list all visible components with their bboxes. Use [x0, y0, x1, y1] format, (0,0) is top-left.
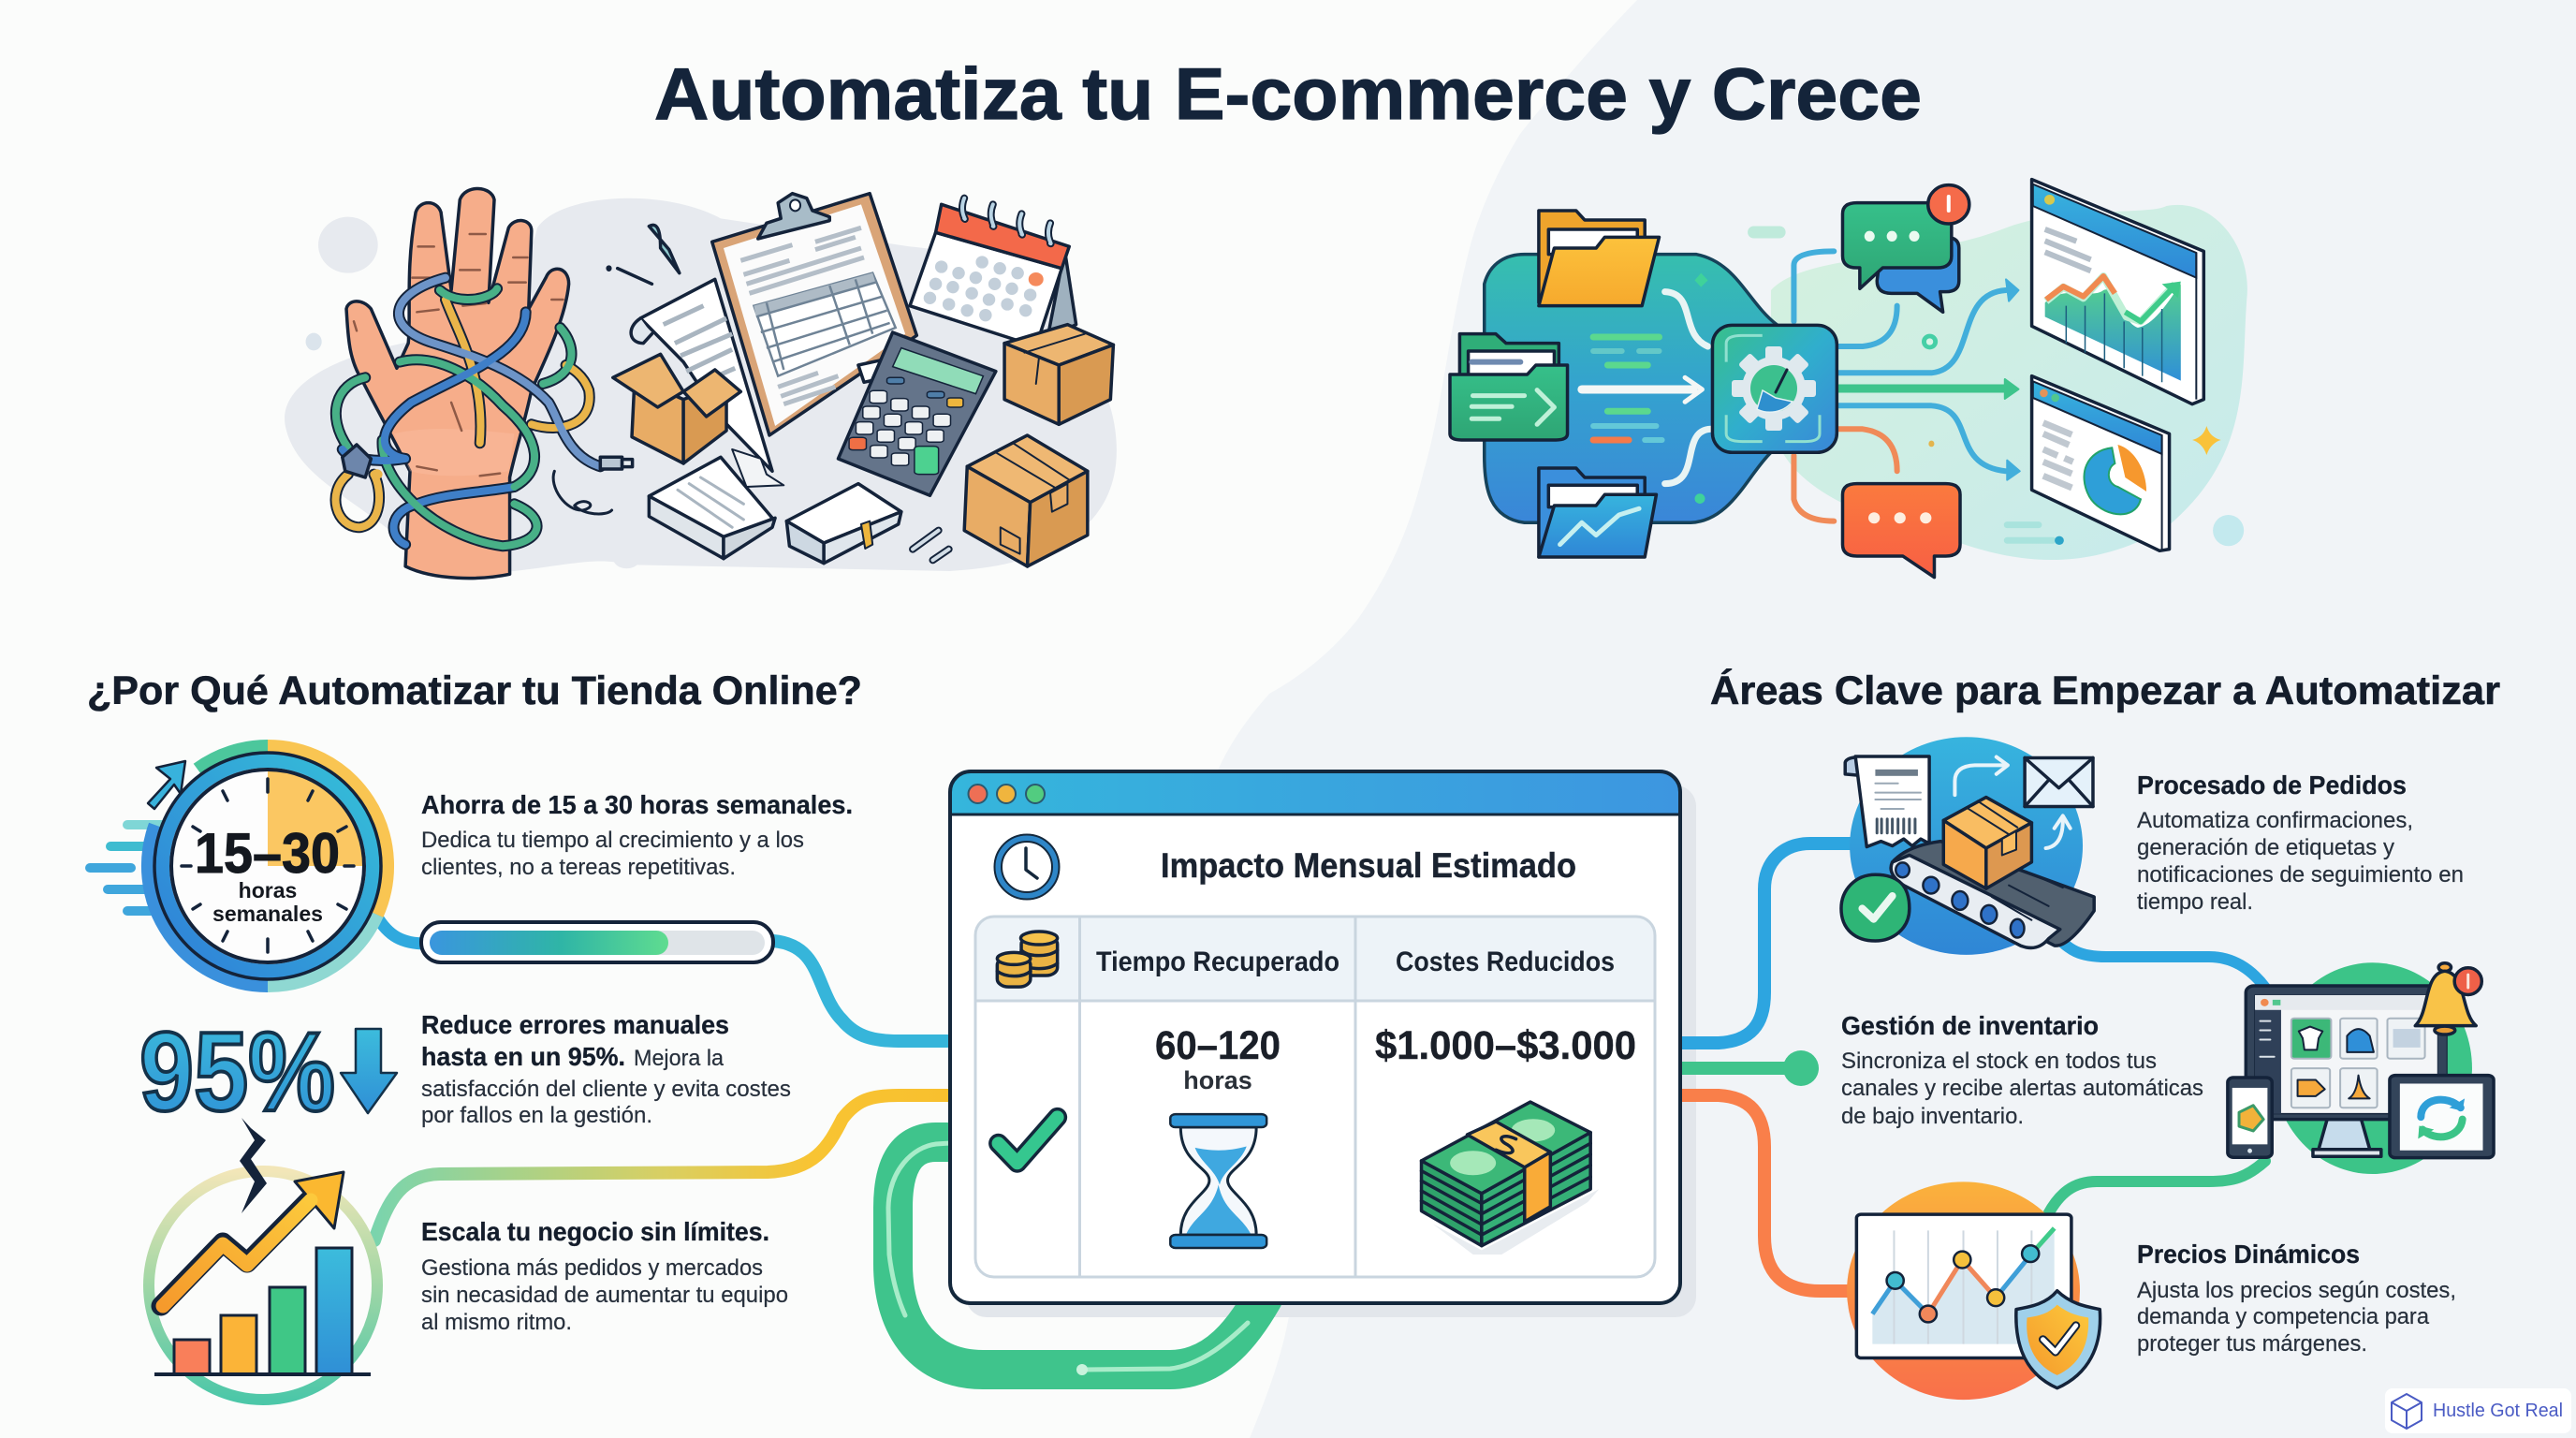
- text: order processing: tiempo real.: [2137, 889, 2253, 915]
- icon: calendar: [910, 198, 1076, 346]
- monitor: [2246, 986, 2447, 1156]
- icon: lightning crack: [240, 1118, 267, 1213]
- text: hours saved: Ahorra de 15 a 30 horas semanales.: [421, 790, 853, 819]
- window header: [950, 771, 1680, 814]
- illustration: manual chaos: [285, 188, 1117, 579]
- icon: yellow folder: [1539, 211, 1660, 306]
- text: errors: satisfacción del cliente y evita costes: [421, 1077, 791, 1102]
- icon: coins: [997, 932, 1058, 987]
- text: inventory: Gestión de inventario: [1841, 1011, 2099, 1040]
- text: order processing: notificaciones de seguimiento en: [2137, 862, 2464, 888]
- icon: loose paper: [631, 279, 772, 471]
- light green blob: [1771, 205, 2247, 560]
- window dots: [968, 785, 1045, 803]
- text: dynamic pricing: [2137, 1240, 2456, 1357]
- text: scale: sin necasidad de aumentar tu equipo: [421, 1283, 788, 1308]
- icon: clock: [994, 835, 1060, 899]
- text: errors: [421, 1010, 791, 1128]
- tablet: [2390, 1076, 2494, 1158]
- text: dynamic pricing: proteger tus márgenes.: [2137, 1331, 2367, 1357]
- icon: dashboard window top: [2032, 180, 2203, 404]
- heading: why automate: ¿Por Qué Automatizar tu Tienda Online?: [87, 668, 862, 713]
- text: scale: al mismo ritmo.: [421, 1310, 572, 1335]
- heading: key areas: Áreas Clave para Empezar a Automatizar: [1710, 668, 2500, 713]
- small accents: [1694, 273, 2221, 545]
- badge: Hustle Got Real: [2385, 1388, 2571, 1433]
- text: inventory: Sincroniza el stock en todos tus: [1841, 1049, 2157, 1074]
- green loop connector: [888, 1142, 1264, 1375]
- table header: time: Tiempo Recuperado: [1096, 946, 1339, 977]
- text: inventory: canales y recibe alertas automáticas: [1841, 1076, 2203, 1101]
- icon: check mark: [999, 1117, 1058, 1163]
- parcel: [1943, 798, 2031, 888]
- icon: order processing: [1841, 737, 2094, 955]
- text: scale: Gestiona más pedidos y mercados: [421, 1255, 763, 1281]
- text: order processing: generación de etiquetas y: [2137, 835, 2394, 860]
- value: hours: 60–120: [1155, 1023, 1281, 1068]
- text: dynamic pricing: Ajusta los precios según costes,: [2137, 1278, 2456, 1303]
- icon: tangled cables: [336, 278, 633, 546]
- background curve panel: [1215, 0, 2576, 1438]
- shield: [2016, 1291, 2100, 1388]
- text: errors: por fallos en la gestión.: [421, 1103, 652, 1128]
- stat: clock 15-30 hours: [90, 745, 388, 987]
- text: inventory: de bajo inventario.: [1841, 1104, 2024, 1129]
- connector lines in blob: [1582, 292, 1711, 484]
- icon: blue folder: [1539, 468, 1656, 557]
- icon: small box: [1004, 325, 1113, 424]
- receipt: [1845, 756, 1929, 847]
- value: hours: horas: [1183, 1066, 1252, 1094]
- text: order processing: Procesado de Pedidos: [2137, 770, 2407, 800]
- value: hours: [1155, 1023, 1281, 1094]
- icon: chat bubbles: [1842, 185, 1969, 312]
- connectors: left and right flow lines: [374, 844, 2265, 1375]
- icon: clipboard with invoice: [712, 194, 916, 435]
- bell: [2415, 963, 2481, 1034]
- icon: gear: [1732, 346, 1816, 431]
- phone: [2228, 1078, 2272, 1157]
- text: hours saved: clientes, no a tereas repetitivas.: [421, 855, 736, 880]
- icon: money stack: [1422, 1102, 1599, 1255]
- icon: hand: [346, 188, 569, 579]
- icon: gear tile: [1712, 325, 1837, 452]
- text: errors: Reduce errores manuales: [421, 1010, 729, 1039]
- bars: [174, 1248, 352, 1374]
- stat: 95 percent: 95%: [139, 1009, 335, 1135]
- main data blob: [1485, 255, 1777, 522]
- icon: cube: [2392, 1394, 2422, 1429]
- icon: stopwatch: semanales: [212, 902, 323, 926]
- table: [975, 917, 1655, 1277]
- check badge: [1841, 874, 1910, 941]
- badge: Hustle Got Real: Hustle Got Real: [2433, 1401, 2563, 1421]
- conveyor: [1891, 842, 2094, 947]
- window shadow: [966, 785, 1696, 1317]
- icon: stopwatch: horas: [239, 878, 297, 902]
- icon: dynamic pricing chart: [1847, 1181, 2100, 1400]
- title: Automatiza tu E-commerce y Crece: [654, 52, 1922, 135]
- icon: inventory devices: [2228, 962, 2494, 1174]
- panel title: Impacto Mensual Estimado: [1161, 846, 1576, 885]
- icon: banknote bundle: [786, 484, 901, 564]
- value: savings: $1.000–$3.000: [1375, 1023, 1636, 1068]
- text: errors: Mejora la: [634, 1046, 724, 1071]
- icon: hourglass: [1170, 1114, 1266, 1248]
- text: hours saved: Dedica tu tiempo al crecimiento y a los: [421, 828, 804, 853]
- arrows: [1954, 757, 2071, 848]
- growth arrow: [161, 1172, 344, 1306]
- progress bar: [421, 922, 773, 962]
- icon: dashboard window bottom: [2032, 376, 2170, 550]
- table header: costs: Costes Reducidos: [1396, 946, 1615, 977]
- icon: down arrow: [341, 1029, 397, 1113]
- icon: up arrow: [148, 761, 185, 809]
- text: order processing: [2137, 770, 2464, 915]
- icon: speed lines: [90, 825, 174, 911]
- text: dynamic pricing: Precios Dinámicos: [2137, 1240, 2360, 1269]
- icon: growth chart: [149, 1171, 377, 1400]
- icon: tools: [606, 225, 680, 284]
- text: dynamic pricing: demanda y competencia para: [2137, 1304, 2430, 1329]
- panel: impacto mensual window: [950, 771, 1680, 1303]
- icon: stopwatch: [147, 745, 388, 987]
- icon: calculator: [838, 332, 996, 495]
- text: scale: Escala tu negocio sin límites.: [421, 1217, 769, 1246]
- text: errors: hasta en un 95%.: [421, 1042, 625, 1071]
- icon: large box: [964, 435, 1088, 566]
- icon: stopwatch: 15–30: [195, 822, 340, 885]
- icon: orange chat bubble: [1842, 484, 1960, 578]
- icon: green folder: [1450, 334, 1568, 440]
- icon: paper clips: [913, 531, 949, 560]
- icon: open cardboard box: [613, 354, 740, 463]
- text: inventory: [1841, 1011, 2203, 1129]
- text: order processing: Automatiza confirmaciones,: [2137, 808, 2413, 833]
- grey blobs: [285, 198, 1117, 575]
- envelope: [2025, 758, 2093, 806]
- illustration: automated workflow: [1450, 180, 2247, 578]
- icon: stacked papers: [649, 449, 783, 559]
- text: hours saved: [421, 790, 853, 880]
- text: scale: [421, 1217, 788, 1335]
- output connectors: [1793, 251, 2020, 521]
